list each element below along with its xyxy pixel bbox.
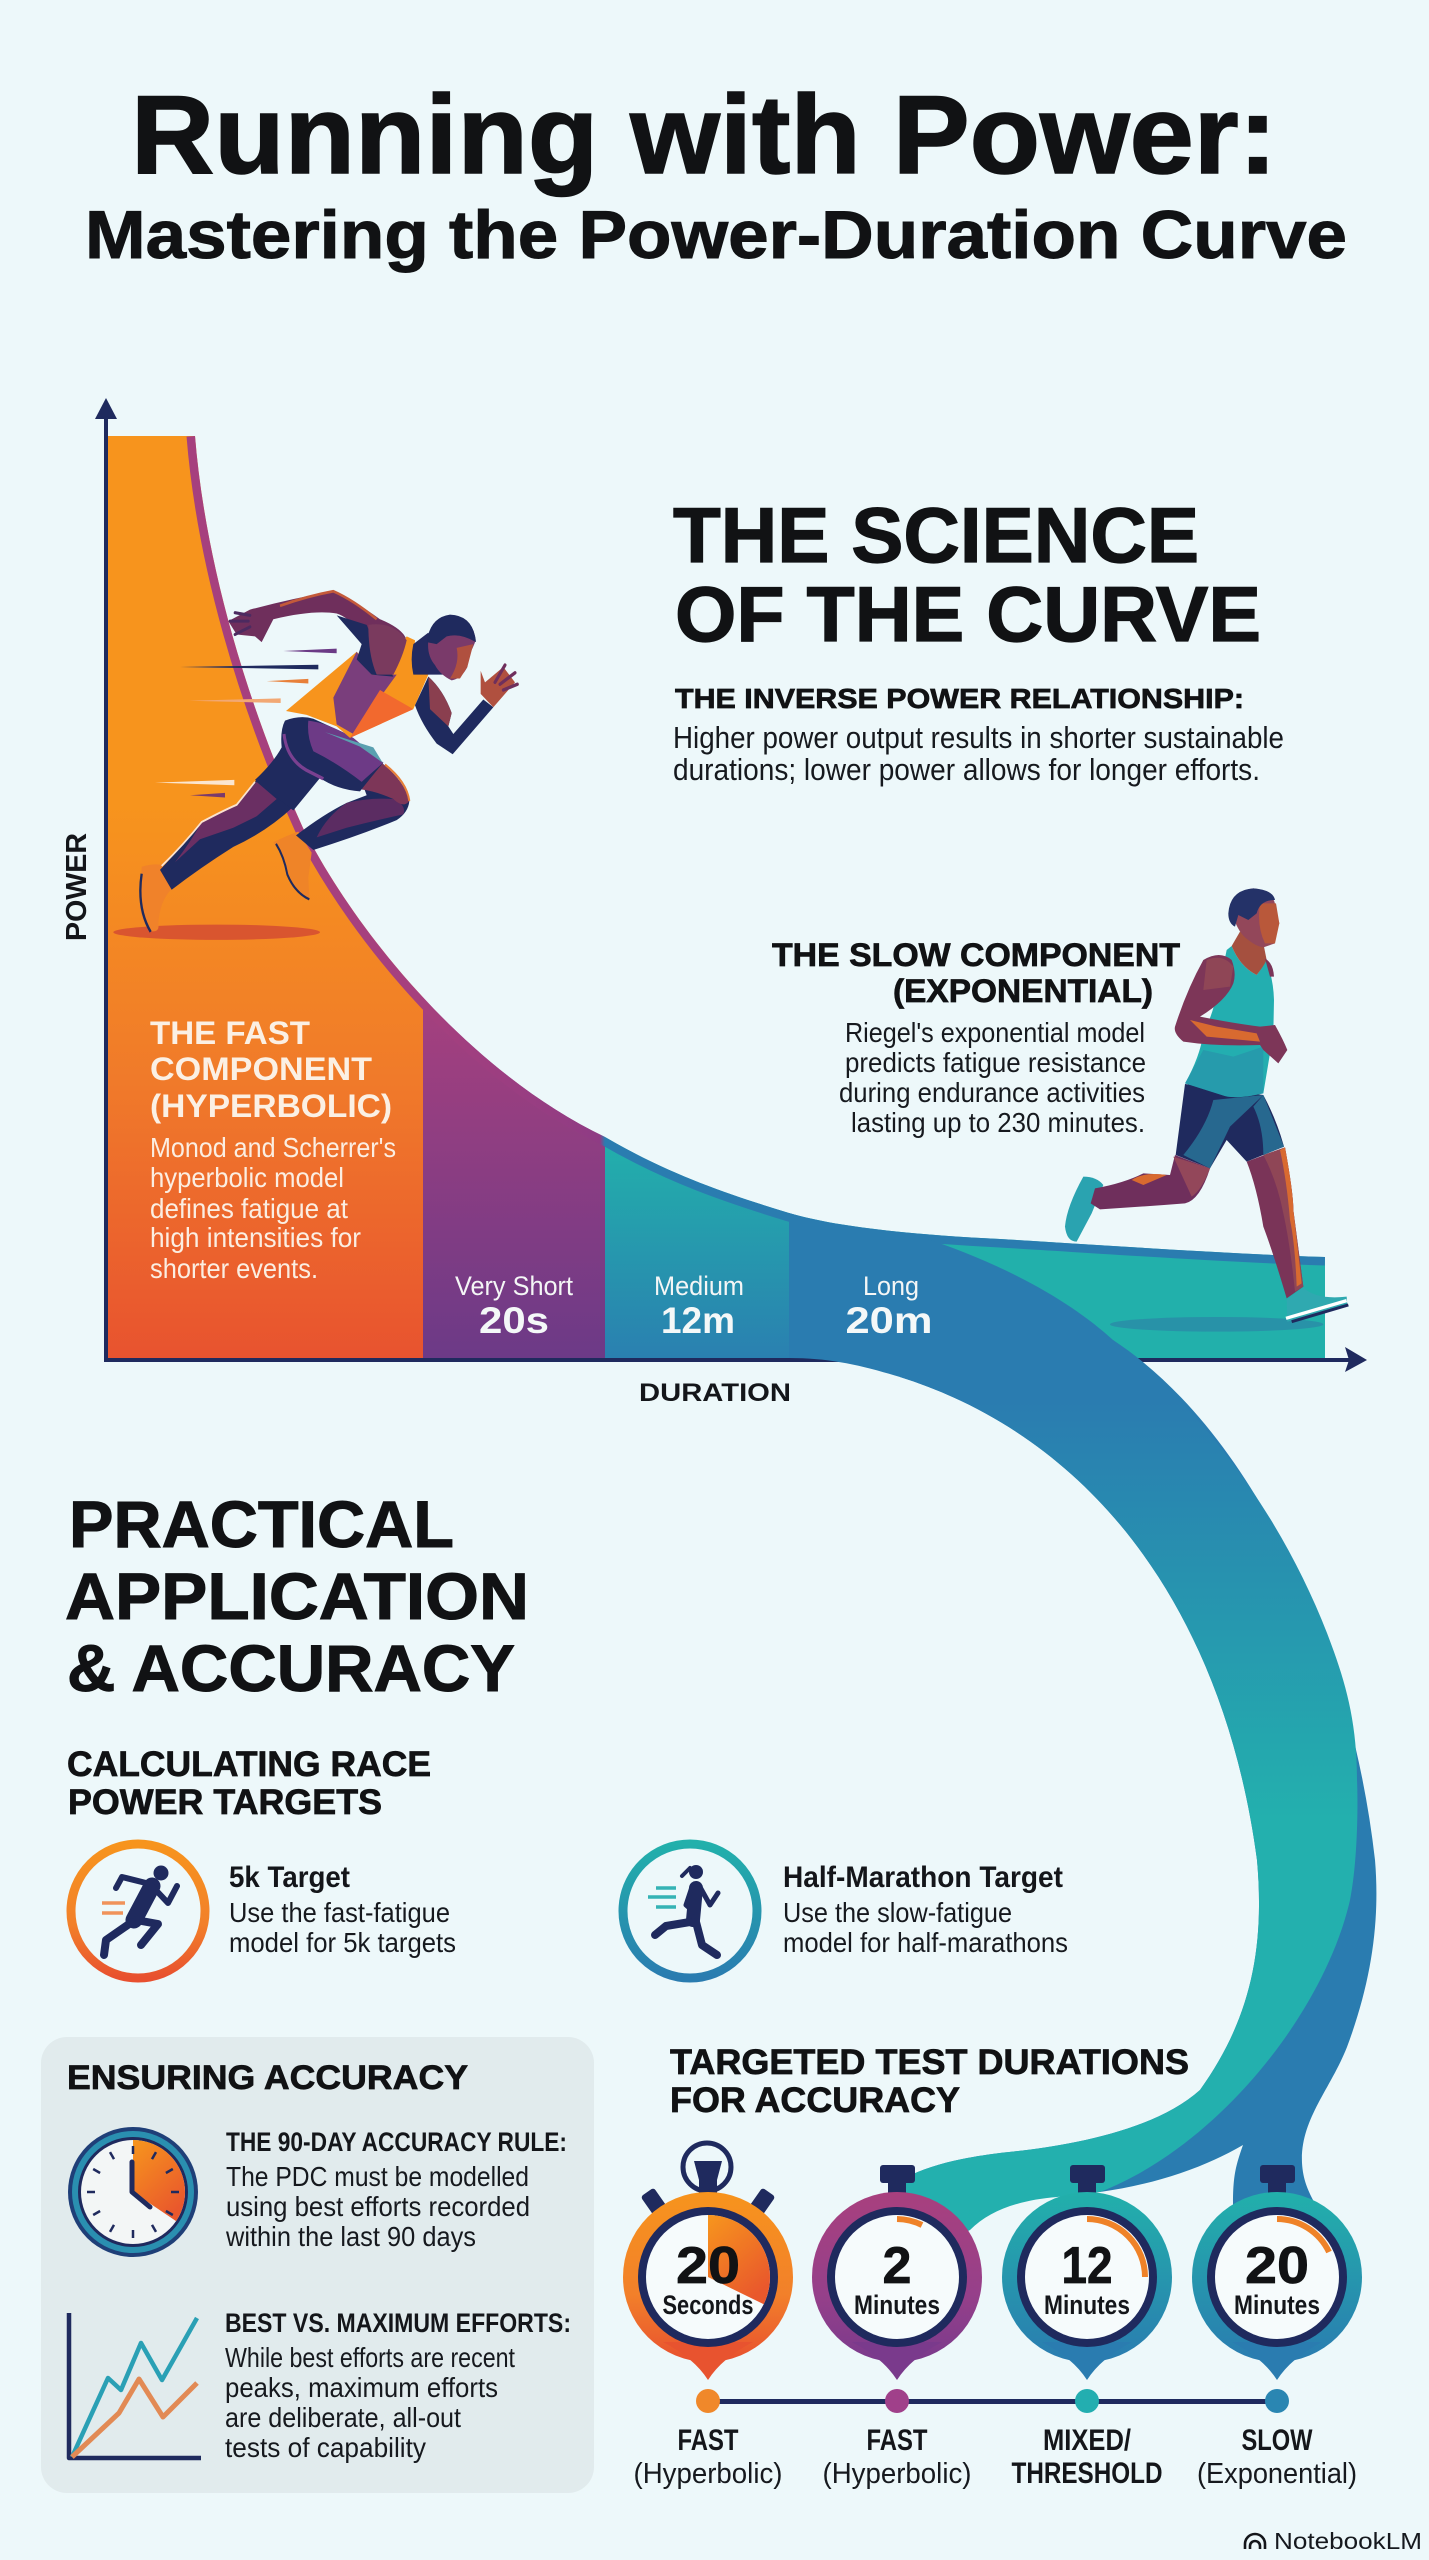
front arm xyxy=(415,677,493,754)
stopwatch: 12 minutes xyxy=(1002,2165,1172,2380)
rear leg xyxy=(1091,1155,1210,1209)
stopwatch: 12 minutes: Minutes xyxy=(1044,2290,1130,2320)
head xyxy=(428,615,476,680)
panel heading: ENSURING ACCURACY xyxy=(67,2059,468,2097)
icon: 5k runner xyxy=(71,1844,205,1978)
shorts xyxy=(1176,1084,1284,1168)
segment label: long 20m: Long xyxy=(863,1271,919,1301)
arm xyxy=(1175,955,1287,1063)
best vs maximum text xyxy=(225,2308,571,2463)
fast component text: hyperbolic model xyxy=(150,1162,344,1193)
5k target text: model for 5k targets xyxy=(229,1927,456,1958)
slow component text: lasting up to 230 minutes. xyxy=(851,1107,1145,1138)
slow component text: predicts fatigue resistance xyxy=(845,1047,1146,1078)
slow component text: during endurance activities xyxy=(839,1077,1145,1108)
label: fast hyperbolic 2: (Hyperbolic) xyxy=(822,2458,972,2490)
icon: line chart xyxy=(69,2313,201,2458)
front leg xyxy=(1247,1147,1303,1298)
front leg xyxy=(296,763,409,850)
slow component text xyxy=(772,937,1180,1138)
practical application heading: & ACCURACY xyxy=(67,1631,515,1705)
rear leg xyxy=(160,780,293,890)
front shoe xyxy=(1287,1288,1347,1322)
targeted test durations heading: FOR ACCURACY xyxy=(670,2081,960,2120)
inverse power relationship text xyxy=(673,683,1284,787)
back arm xyxy=(228,591,407,675)
rear shoe xyxy=(140,864,172,931)
fast component text: Monod and Scherrer's xyxy=(150,1132,396,1163)
label: slow exponential xyxy=(1197,2424,1357,2490)
shoulder shadow xyxy=(337,615,393,677)
label: fast hyperbolic 1: FAST xyxy=(678,2424,738,2457)
y axis with arrow xyxy=(95,398,117,1362)
fast component text xyxy=(150,1015,396,1284)
90-day rule text: using best efforts recorded xyxy=(226,2191,530,2222)
segment label: very short 20s xyxy=(455,1271,573,1341)
label: slow exponential: SLOW xyxy=(1242,2424,1313,2457)
power-duration curve chart xyxy=(61,398,1376,2250)
science heading xyxy=(673,491,1261,658)
stopwatch: 2 minutes: Minutes xyxy=(854,2290,940,2320)
head xyxy=(1233,888,1279,947)
segment label: very short 20s: 20s xyxy=(479,1300,549,1341)
front shoe xyxy=(273,832,312,899)
inverse power relationship text: durations; lower power allows for longer efforts. xyxy=(673,752,1260,787)
fast component text: defines fatigue at xyxy=(150,1193,348,1224)
torso tank top xyxy=(286,636,428,738)
subtitle: Mastering the Power-Duration Curve xyxy=(85,197,1347,273)
tank top xyxy=(1185,946,1274,1097)
segment label: medium 12m: 12m xyxy=(661,1300,735,1341)
race targets heading: POWER TARGETS xyxy=(68,1783,382,1822)
fast component text: (HYPERBOLIC) xyxy=(150,1088,392,1124)
sprinter illustration xyxy=(113,591,517,940)
label: mixed threshold: MIXED/ xyxy=(1043,2424,1132,2457)
stopwatch: 20 seconds: Seconds xyxy=(662,2290,754,2320)
segment label: very short 20s: Very Short xyxy=(455,1271,573,1301)
5k target text: 5k Target xyxy=(229,1861,350,1894)
icon: clock xyxy=(68,2127,198,2257)
hand xyxy=(481,667,515,707)
practical application heading: APPLICATION xyxy=(65,1559,529,1633)
x axis with arrow xyxy=(104,1347,1367,1372)
fast component text: COMPONENT xyxy=(150,1051,372,1087)
rear shoe xyxy=(1065,1177,1103,1242)
science heading: OF THE CURVE xyxy=(675,570,1261,658)
5k target text: Use the fast-fatigue xyxy=(229,1897,450,1928)
notebooklm watermark: NotebookLM xyxy=(1274,2528,1422,2554)
fast component text: shorter events. xyxy=(150,1253,318,1284)
icon: half-marathon runner xyxy=(623,1844,757,1978)
90-day rule text: The PDC must be modelled xyxy=(226,2161,529,2192)
targeted test durations heading xyxy=(670,2043,1189,2120)
best vs maximum text: are deliberate, all-out xyxy=(225,2402,461,2433)
y axis label: POWER xyxy=(61,833,93,941)
segment label: long 20m: 20m xyxy=(846,1300,932,1341)
title: Running with Power: xyxy=(131,73,1277,197)
90-day rule text: within the last 90 days xyxy=(225,2221,476,2252)
half-marathon target text: Use the slow-fatigue xyxy=(783,1897,1012,1928)
stopwatch: 2 minutes: 2 xyxy=(882,2237,912,2295)
best vs maximum text: While best efforts are recent xyxy=(225,2342,515,2373)
practical application heading: PRACTICAL xyxy=(69,1487,454,1561)
label: mixed threshold xyxy=(1012,2424,1162,2490)
segment label: medium 12m: Medium xyxy=(654,1271,744,1301)
label: fast hyperbolic 2: FAST xyxy=(866,2424,928,2457)
neck xyxy=(1232,932,1267,975)
speed lines xyxy=(155,649,337,798)
label: fast hyperbolic 2 xyxy=(822,2424,972,2490)
curve area segments xyxy=(108,430,1329,1360)
stopwatch: 20 minutes: Minutes xyxy=(1234,2290,1320,2320)
x axis label: DURATION xyxy=(639,1379,791,1407)
flowing ribbon xyxy=(789,1213,1376,2250)
best vs maximum text: BEST VS. MAXIMUM EFFORTS: xyxy=(225,2308,571,2338)
stopwatch: 20 minutes: 20 xyxy=(1245,2237,1309,2295)
stopwatch: 12 minutes: 12 xyxy=(1062,2237,1112,2295)
segment label: long 20m xyxy=(846,1271,932,1341)
label: fast hyperbolic 1: (Hyperbolic) xyxy=(634,2458,782,2490)
race targets heading xyxy=(67,1745,431,1822)
neck xyxy=(412,633,443,675)
timeline with dots xyxy=(696,2389,1289,2413)
stopwatch: 20 seconds: 20 xyxy=(676,2237,740,2295)
jogger illustration xyxy=(1065,888,1348,1332)
panel: ensuring accuracy xyxy=(41,2037,594,2493)
fast component text: high intensities for xyxy=(150,1222,361,1253)
best vs maximum text: tests of capability xyxy=(225,2432,426,2463)
inverse power relationship text: Higher power output results in shorter sustainable xyxy=(673,720,1284,755)
inverse power relationship text: THE INVERSE POWER RELATIONSHIP: xyxy=(675,683,1244,714)
half-marathon target text xyxy=(783,1861,1068,1958)
fast component text: THE FAST xyxy=(150,1015,310,1051)
90-day rule text: THE 90-DAY ACCURACY RULE: xyxy=(226,2127,567,2157)
stopwatch: 2 minutes xyxy=(812,2165,982,2380)
slow component text: Riegel's exponential model xyxy=(845,1017,1145,1048)
label: fast hyperbolic 1 xyxy=(634,2424,782,2490)
label: slow exponential: (Exponential) xyxy=(1197,2458,1357,2490)
half-marathon target text: Half-Marathon Target xyxy=(783,1861,1063,1894)
back hand fingers xyxy=(230,613,250,634)
targeted test durations heading: TARGETED TEST DURATIONS xyxy=(670,2043,1189,2082)
stopwatch: 20 seconds xyxy=(623,2143,793,2380)
5k target text xyxy=(229,1861,456,1958)
slow component text: THE SLOW COMPONENT xyxy=(772,937,1180,973)
shorts xyxy=(255,717,383,811)
race targets heading: CALCULATING RACE xyxy=(67,1745,431,1784)
best vs maximum text: peaks, maximum efforts xyxy=(225,2372,498,2403)
90-day rule text xyxy=(225,2127,567,2252)
segment label: medium 12m xyxy=(654,1271,744,1341)
slow component text: (EXPONENTIAL) xyxy=(893,973,1153,1009)
science heading: THE SCIENCE xyxy=(673,491,1199,579)
stopwatch: 20 minutes xyxy=(1192,2165,1362,2380)
half-marathon target text: model for half-marathons xyxy=(783,1927,1068,1958)
label: mixed threshold: THRESHOLD xyxy=(1012,2457,1162,2490)
practical application heading xyxy=(65,1487,529,1705)
